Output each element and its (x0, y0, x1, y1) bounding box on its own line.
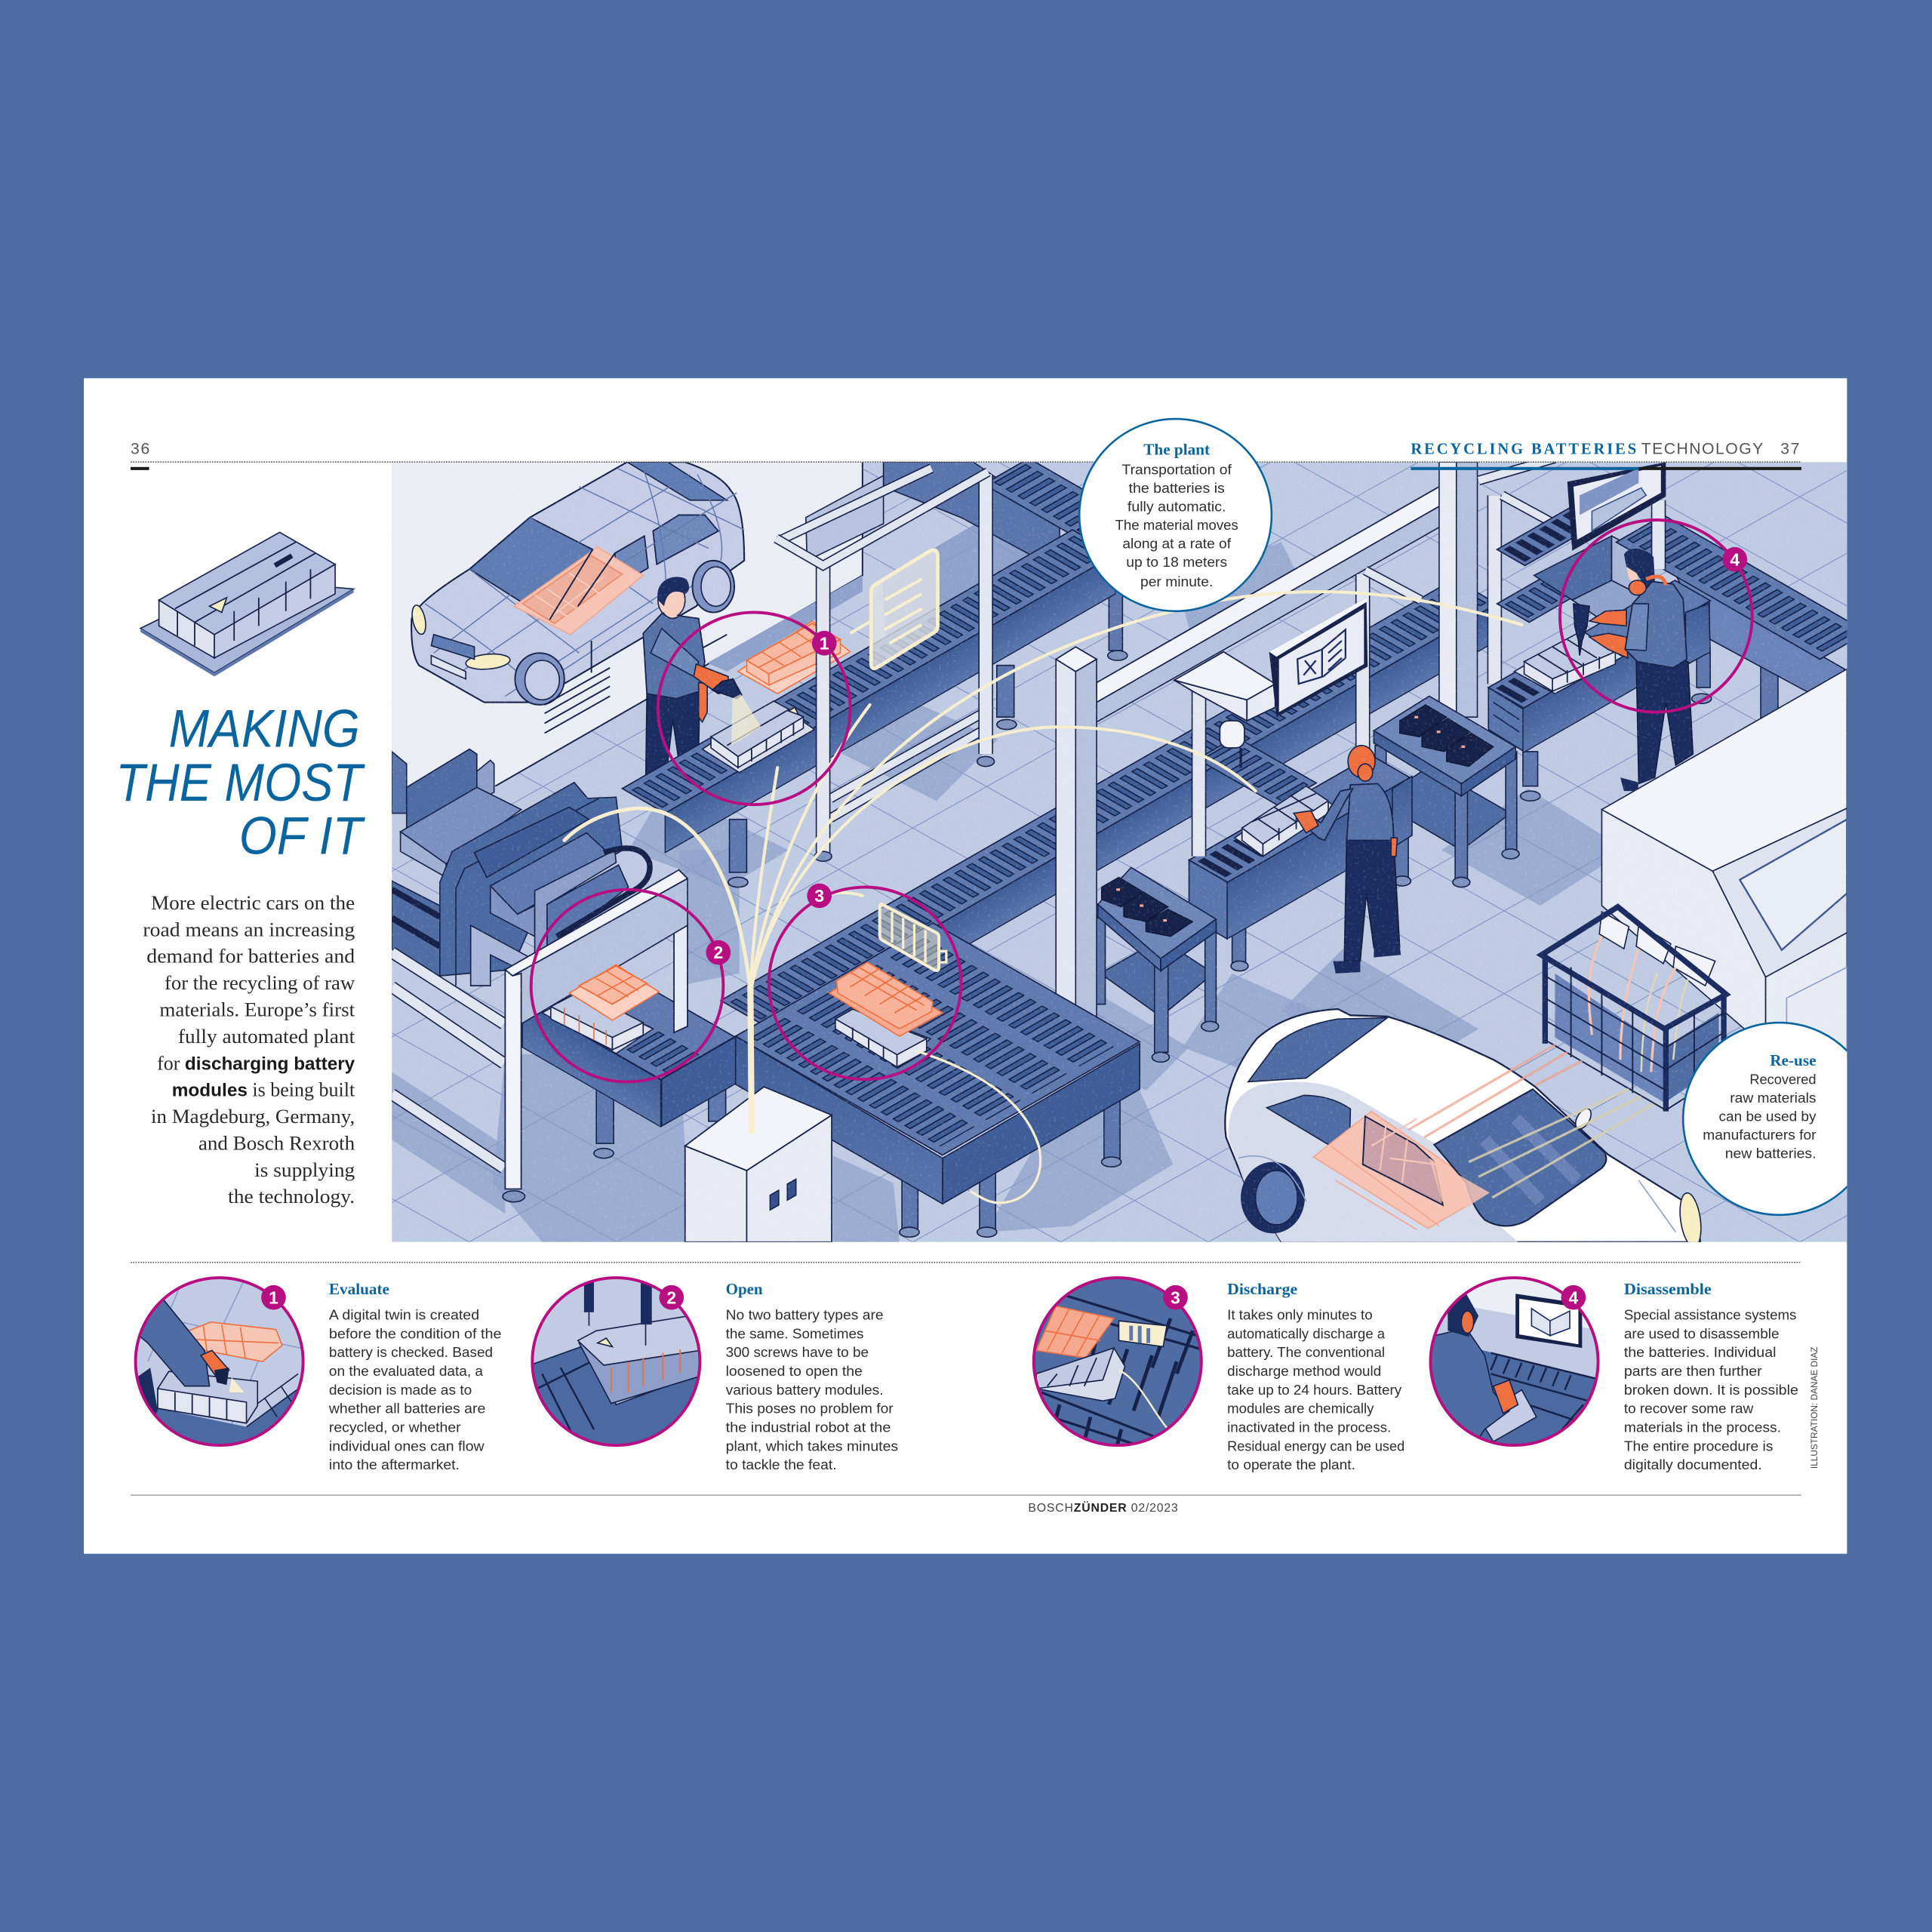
central pillar (1056, 647, 1097, 1023)
monitor 2 (1567, 462, 1666, 569)
illustration credit: ILLUSTRATION: DANAE DIAZ (1809, 1346, 1820, 1469)
step 1 text: before the condition of the (329, 1325, 501, 1341)
divider (131, 1262, 1801, 1263)
car with wireframe grid and battery (410, 462, 744, 733)
large discharge table (736, 923, 1140, 1237)
step 3 text: It takes only minutes to (1227, 1307, 1373, 1323)
battery 2 with digital twin (542, 964, 659, 1054)
callout: re-use: raw materials (1730, 1090, 1817, 1106)
step 1 medallion (133, 1275, 306, 1447)
step 1 medallion: 1 (269, 1287, 278, 1307)
intro text: and Bosch Rexroth (198, 1133, 355, 1155)
step 2 text: loosened to open the (726, 1363, 863, 1379)
step 2 text: This poses no problem for (726, 1401, 894, 1417)
recycling cage with raw materials (1541, 907, 1726, 1112)
page number left (131, 441, 151, 470)
title: MAKING (169, 698, 360, 758)
right machine (1601, 669, 1847, 1060)
callout: the plant: The material moves (1115, 517, 1238, 533)
step markers in the scene: 1 (820, 633, 829, 653)
intro text: More electric cars on the (151, 892, 355, 914)
step 2 text: the industrial robot at the (726, 1419, 891, 1435)
step markers in the scene (531, 520, 1752, 1081)
step 2 medallion: 2 (666, 1287, 676, 1307)
step 4 text: materials in the process. (1624, 1419, 1781, 1435)
callout: the plant (1079, 419, 1272, 611)
step 4 medallion: 4 (1569, 1287, 1579, 1307)
step 1 text (328, 1280, 501, 1472)
white car with battery (1225, 1009, 1704, 1248)
intro text: demand for batteries and (146, 946, 355, 968)
callout: the plant: along at a rate of (1122, 536, 1232, 552)
step 3 text: to operate the plant. (1227, 1457, 1355, 1472)
callout: re-use: manufacturers for (1703, 1127, 1817, 1143)
page number left: 36 (131, 441, 151, 458)
battery-level icon (880, 904, 946, 971)
intro text: materials. Europe’s first (159, 999, 355, 1021)
intro text (143, 892, 355, 1208)
callout: the plant: fully automatic. (1128, 499, 1226, 515)
callout: re-use: Re-use (1770, 1051, 1817, 1069)
callout: re-use: can be used by (1719, 1109, 1817, 1124)
footer text: BOSCHZÜNDER 02/2023 (1028, 1500, 1179, 1515)
person 3 with ear protection (1589, 549, 1693, 791)
step 1 text: A digital twin is created (329, 1307, 479, 1323)
header rule (131, 461, 1801, 463)
person 2 with orange hair (1294, 746, 1401, 974)
step 2 text: to tackle the feat. (726, 1457, 837, 1472)
step 1 text: into the aftermarket. (329, 1457, 460, 1472)
title: OF IT (239, 805, 366, 865)
step 1 text: decision is made as to (329, 1382, 472, 1398)
top-right conveyors (1497, 494, 1867, 718)
step 4 text: to recover some raw (1624, 1401, 1754, 1417)
intro text: road means an increasing (143, 918, 355, 940)
factory floor with tiles and shadows (392, 462, 1847, 1242)
table with trays (upper) (1374, 696, 1519, 888)
main illustration: battery recycling plant (392, 458, 1867, 1248)
header right: TECHNOLOGY (1641, 441, 1763, 458)
step 2 text: Open (726, 1280, 763, 1298)
station 4 workbench and battery (1488, 580, 1712, 801)
step 3 text: take up to 24 hours. Battery (1227, 1382, 1402, 1398)
step markers in the scene: 2 (713, 943, 723, 962)
step 4 text (1624, 1280, 1798, 1472)
sensor box (1174, 652, 1275, 857)
conveyor A: long upper belt (622, 530, 1115, 888)
callout: the plant: up to 18 meters (1126, 554, 1227, 570)
battery 1 on conveyor with scan beam (703, 695, 814, 773)
step 3 text: battery. The conventional (1227, 1344, 1385, 1360)
intro text: fully automated plant (178, 1026, 355, 1048)
callout: re-use: Recovered (1749, 1072, 1817, 1088)
white magazine spread (84, 378, 1847, 1554)
step 2 text: 300 screws have to be (726, 1344, 869, 1360)
intro text: modules is being built (172, 1079, 355, 1101)
callout: re-use (1683, 1023, 1875, 1215)
step 2 medallion (530, 1275, 703, 1447)
callout: the plant: Transportation of (1122, 462, 1232, 478)
battery 3 with digital twin (829, 962, 943, 1067)
step 3 text: inactivated in the process. (1227, 1419, 1391, 1435)
step 2 text: No two battery types are (726, 1307, 884, 1323)
step 3 text: Residual energy can be used (1227, 1438, 1404, 1454)
intro text: for discharging battery (157, 1052, 355, 1074)
step 3 medallion (1032, 1275, 1205, 1454)
step 2 text: various battery modules. (726, 1382, 884, 1398)
gantry in front of station 2 (392, 870, 688, 1202)
callout: re-use: new batteries. (1725, 1146, 1817, 1161)
step 2 text: plant, which takes minutes (726, 1438, 898, 1454)
callout: the plant: per minute. (1140, 574, 1213, 589)
station D workbench (1189, 755, 1412, 971)
callout: the plant: The plant (1143, 440, 1210, 458)
flow lines from control cabinet (565, 592, 1521, 1203)
conveyor C: long middle belt (720, 587, 1487, 1023)
pale back wall area (392, 462, 863, 789)
step 3 medallion: 3 (1171, 1287, 1180, 1307)
left machine / tunnel (392, 749, 650, 986)
step markers in the scene: 4 (1730, 549, 1740, 569)
step 1 text: on the evaluated data, a (329, 1363, 484, 1379)
step 3 text: automatically discharge a (1227, 1325, 1386, 1341)
step 1 text: whether all batteries are (328, 1401, 485, 1417)
header right: 37 (1780, 441, 1801, 458)
digital twin 1 (orange) (738, 621, 851, 694)
step markers in the scene: 3 (814, 886, 824, 906)
step 2 text: the same. Sometimes (726, 1325, 863, 1341)
station 2 conveyor (522, 958, 736, 1158)
step 3 text (1227, 1280, 1404, 1472)
step 1 text: Evaluate (329, 1280, 389, 1298)
step 1 text: individual ones can flow (329, 1438, 485, 1454)
intro text: the technology. (228, 1186, 355, 1208)
step 3 text: discharge method would (1227, 1363, 1381, 1379)
step 4 text: broken down. It is possible (1624, 1382, 1798, 1398)
intro text: is supplying (254, 1159, 355, 1181)
person 1 scanning a battery (643, 577, 742, 789)
step 4 text: digitally documented. (1624, 1457, 1762, 1472)
step 4 text: parts are then further (1624, 1363, 1762, 1379)
step 4 text: the batteries. Individual (1624, 1344, 1776, 1360)
step 4 medallion (1429, 1275, 1601, 1447)
step 4 text: The entire procedure is (1624, 1438, 1773, 1454)
step 3 text: modules are chemically (1227, 1401, 1374, 1417)
right column (1439, 458, 1556, 717)
header right (1411, 441, 1801, 470)
tool in station 4 (1574, 604, 1589, 656)
step 2 text (726, 1280, 898, 1472)
footer rule (131, 1494, 1801, 1496)
step 4 text: Special assistance systems (1624, 1307, 1796, 1323)
intro text: in Magdeburg, Germany, (151, 1106, 355, 1128)
intro text: for the recycling of raw (165, 972, 355, 994)
back conveyor running down-right (883, 462, 1128, 661)
table with trays (lower) (1094, 867, 1219, 1062)
monitor 1 with manual icon (1269, 598, 1367, 717)
step 4 text: are used to disassemble (1624, 1325, 1780, 1341)
infographic page (84, 378, 1847, 1554)
paper-grain speckle (392, 462, 1847, 1242)
control cabinet (685, 1087, 832, 1242)
step 3 text: Discharge (1227, 1280, 1297, 1298)
header right: RECYCLING BATTERIES (1411, 441, 1636, 458)
icon: battery module (140, 532, 354, 676)
step 1 text: recycled, or whether (329, 1419, 461, 1435)
callout: the plant: the batteries is (1129, 480, 1225, 496)
title: THE MOST (115, 752, 366, 812)
step 1 text: battery is checked. Based (329, 1344, 493, 1360)
step 4 text: Disassemble (1624, 1280, 1712, 1298)
gantry with digital document (777, 468, 995, 861)
digital document icon (851, 550, 937, 669)
title (115, 698, 366, 865)
white overhead beam (1097, 487, 1457, 764)
connecting belt to station D (1206, 741, 1318, 805)
battery at station D (1235, 786, 1337, 857)
